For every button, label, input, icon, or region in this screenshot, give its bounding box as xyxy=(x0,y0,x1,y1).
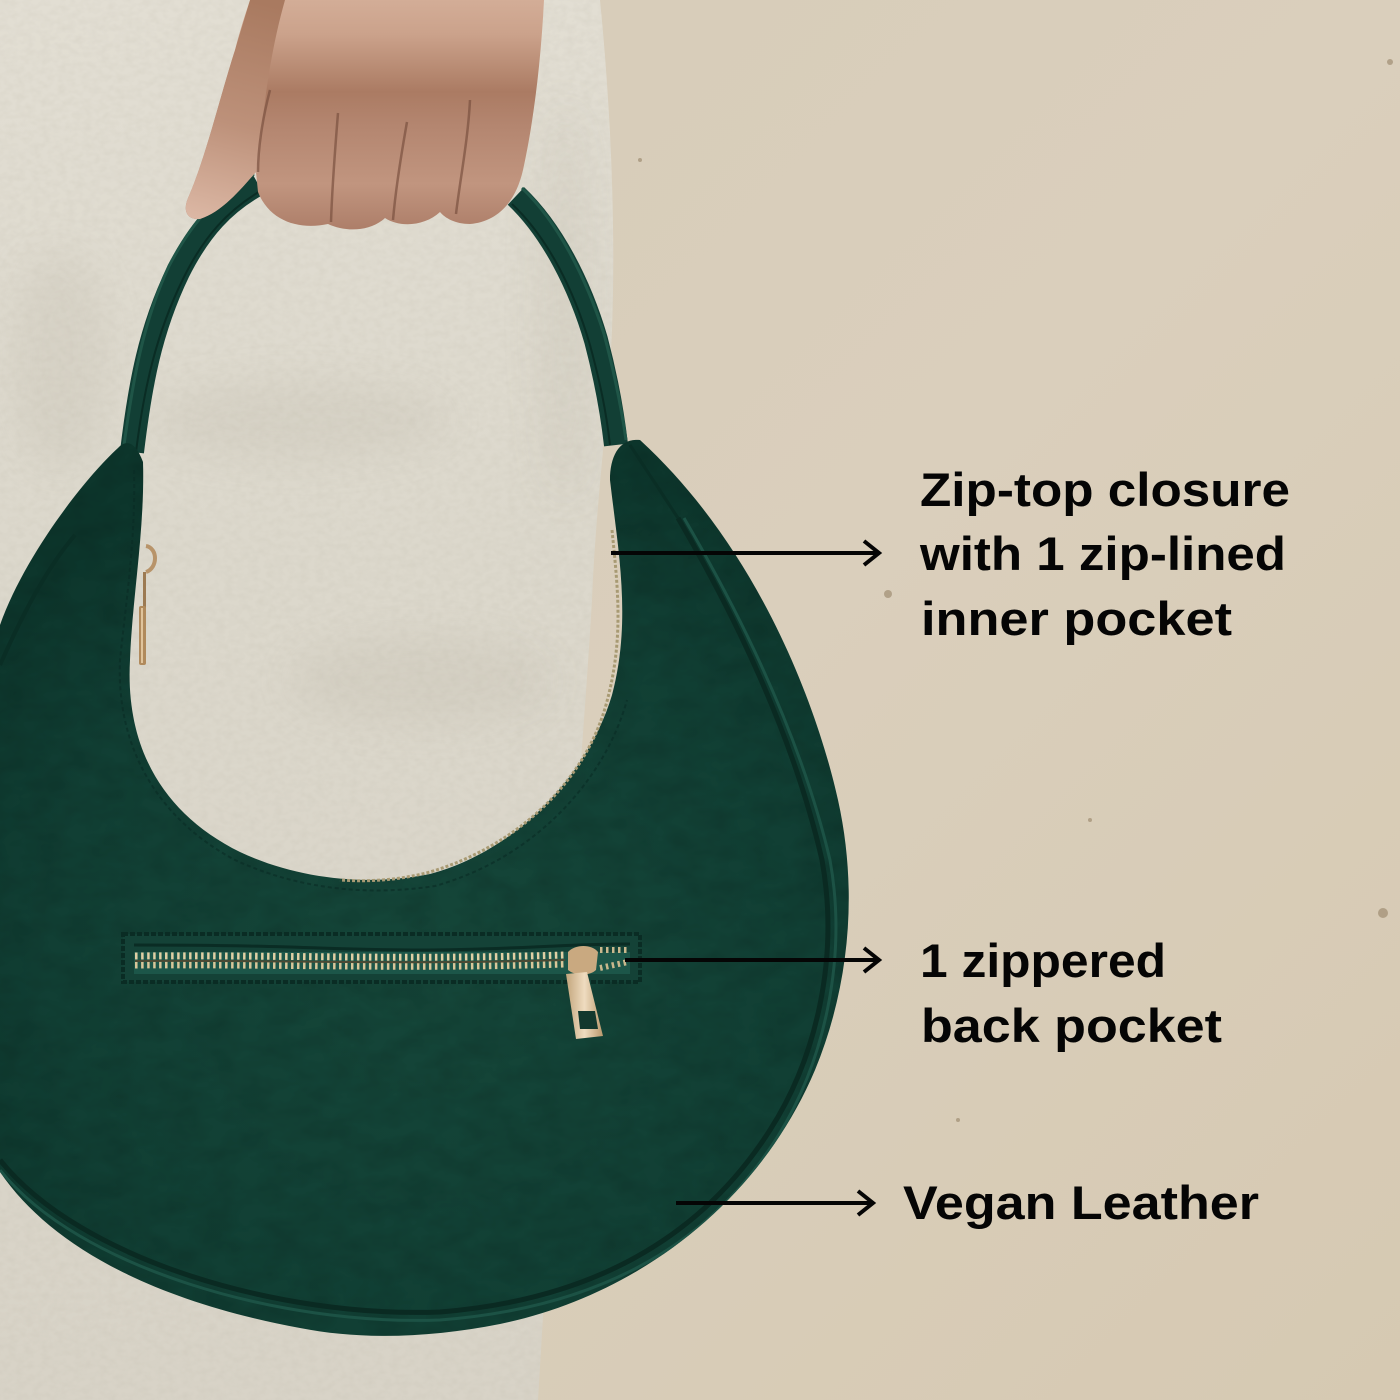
top zipper pull xyxy=(139,546,155,665)
label: vegan leather: Vegan Leather xyxy=(903,1176,1259,1229)
label: back pocket: 1 zippered xyxy=(920,934,1166,987)
finger creases xyxy=(258,90,470,222)
arrow: vegan leather xyxy=(676,1191,873,1215)
label: back pocket xyxy=(920,934,1222,1052)
callout: vegan leather xyxy=(676,1176,1259,1229)
label: back pocket: back pocket xyxy=(921,999,1222,1052)
label: zip-top closure: Zip-top closure xyxy=(920,463,1290,516)
inner zipper edge xyxy=(340,530,618,881)
label: zip-top closure xyxy=(919,463,1290,645)
callout: zip-top closure xyxy=(611,463,1290,645)
label: zip-top closure: inner pocket xyxy=(921,592,1232,645)
linen trousers xyxy=(0,0,640,1400)
zipper pull xyxy=(566,946,603,1039)
callout: back pocket xyxy=(625,934,1222,1052)
back pocket zipper xyxy=(123,934,640,1039)
label: zip-top closure: with 1 zip-lined xyxy=(919,527,1286,580)
bag body xyxy=(0,430,860,1350)
wall specks xyxy=(638,59,1393,1122)
arrow: zip-top closure xyxy=(611,541,879,565)
hand holding handle xyxy=(180,0,550,235)
arrow: back pocket xyxy=(625,948,879,972)
bag seam piping xyxy=(0,518,828,1312)
bag handle xyxy=(124,174,626,452)
